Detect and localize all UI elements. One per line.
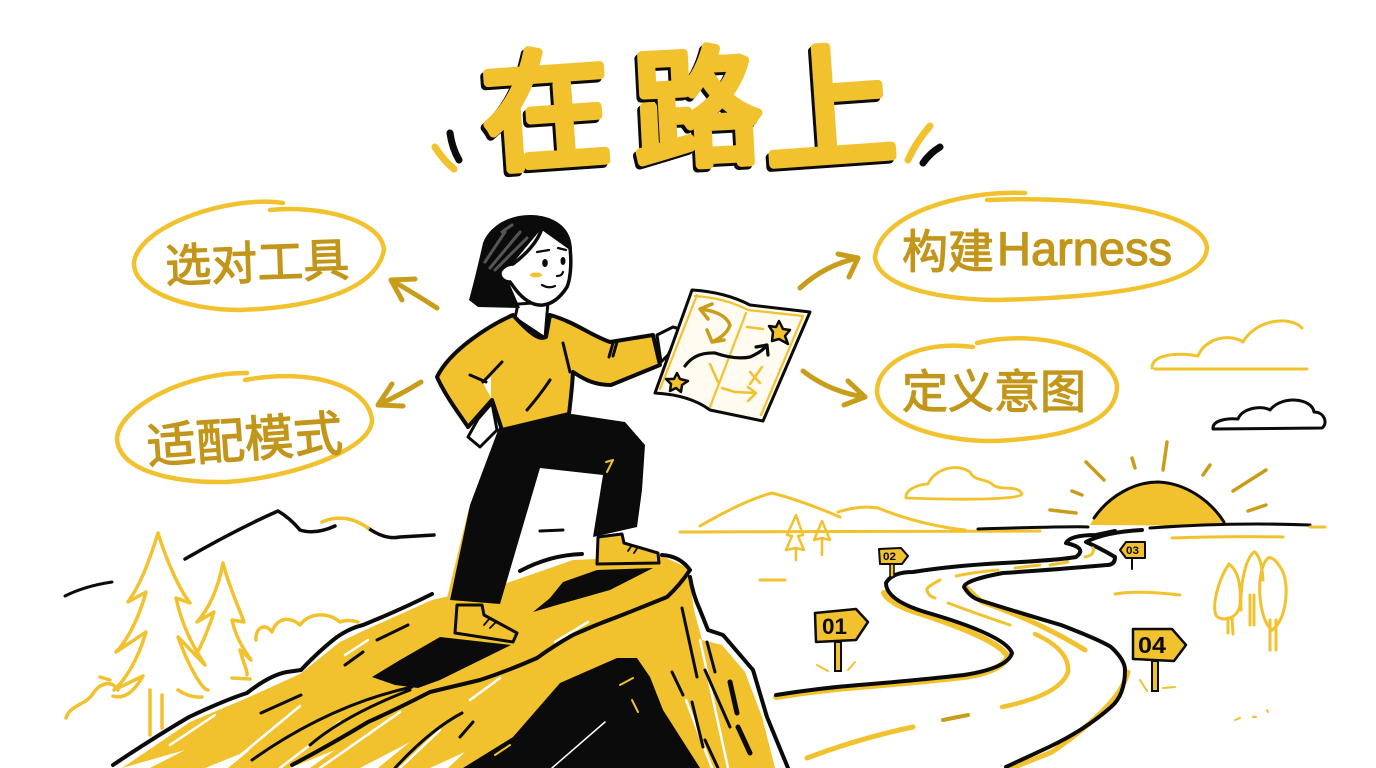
pine trees left: [66, 533, 358, 735]
rock highlights: [170, 622, 728, 768]
title: 在: [475, 5, 616, 198]
horizon and hills right: [680, 493, 1180, 595]
cloud: mid yellow: [906, 468, 1022, 499]
right hand: [657, 327, 690, 362]
arrows: [378, 254, 865, 406]
hair sheen: [485, 225, 527, 270]
face: [500, 228, 571, 305]
title: 上: [753, 3, 898, 203]
face details: [542, 259, 548, 267]
title: [472, 0, 901, 203]
sign 02: [879, 548, 908, 577]
rock outline: [113, 554, 788, 768]
title: 路: [628, 4, 765, 195]
shoes: [455, 605, 517, 642]
sweater creases: [470, 342, 617, 410]
label: 适配模式: [117, 373, 372, 482]
sign 04: 04: [1138, 632, 1166, 658]
sign 02: 02: [883, 551, 896, 563]
rock body: [122, 556, 775, 768]
sign 04: [1133, 629, 1186, 691]
road centre dashes: [927, 548, 1093, 625]
person: [437, 215, 690, 642]
map: [655, 290, 810, 421]
title: 上: [756, 0, 901, 199]
sign 01: 01: [822, 614, 847, 639]
title: 路: [625, 7, 763, 198]
cave: [463, 658, 700, 768]
road: [776, 530, 1142, 768]
sign 03: 03: [1126, 545, 1139, 557]
map stars: [769, 321, 790, 344]
label: 定义意图: [877, 338, 1117, 441]
cloud: top yellow: [1152, 321, 1307, 369]
foot shadow left: [372, 637, 511, 688]
sweater gap: [483, 377, 491, 398]
label: 适配模式: 适配模式: [144, 394, 345, 479]
small pines: [786, 515, 830, 560]
hair: [469, 215, 572, 308]
title sparks: [435, 126, 940, 169]
background mountains left: [65, 511, 563, 596]
rock cracks: [252, 608, 730, 768]
pants: [449, 510, 470, 596]
title: 在: [472, 8, 613, 202]
sign 01: [815, 609, 868, 671]
cliff: [113, 554, 788, 768]
label: 定义意图: 定义意图: [902, 356, 1086, 422]
label: 构建Harness: 构建: [902, 216, 994, 282]
neck: [515, 302, 548, 338]
label: 选对工具: [134, 202, 384, 310]
sign 03: [1120, 542, 1145, 569]
label: 构建Harness: [875, 193, 1207, 300]
label: 构建Harness: Harness: [997, 222, 1172, 275]
sweater: [437, 315, 660, 430]
cloud: black: [1213, 400, 1325, 429]
left hand: [468, 403, 497, 447]
map routes: [700, 304, 730, 342]
cave highlights: [552, 722, 605, 768]
trees right: [1215, 552, 1286, 650]
ground specks: [1235, 710, 1268, 720]
sun: [978, 442, 1325, 538]
label: 选对工具: 选对工具: [164, 224, 350, 296]
foot shadow right: [533, 568, 653, 612]
